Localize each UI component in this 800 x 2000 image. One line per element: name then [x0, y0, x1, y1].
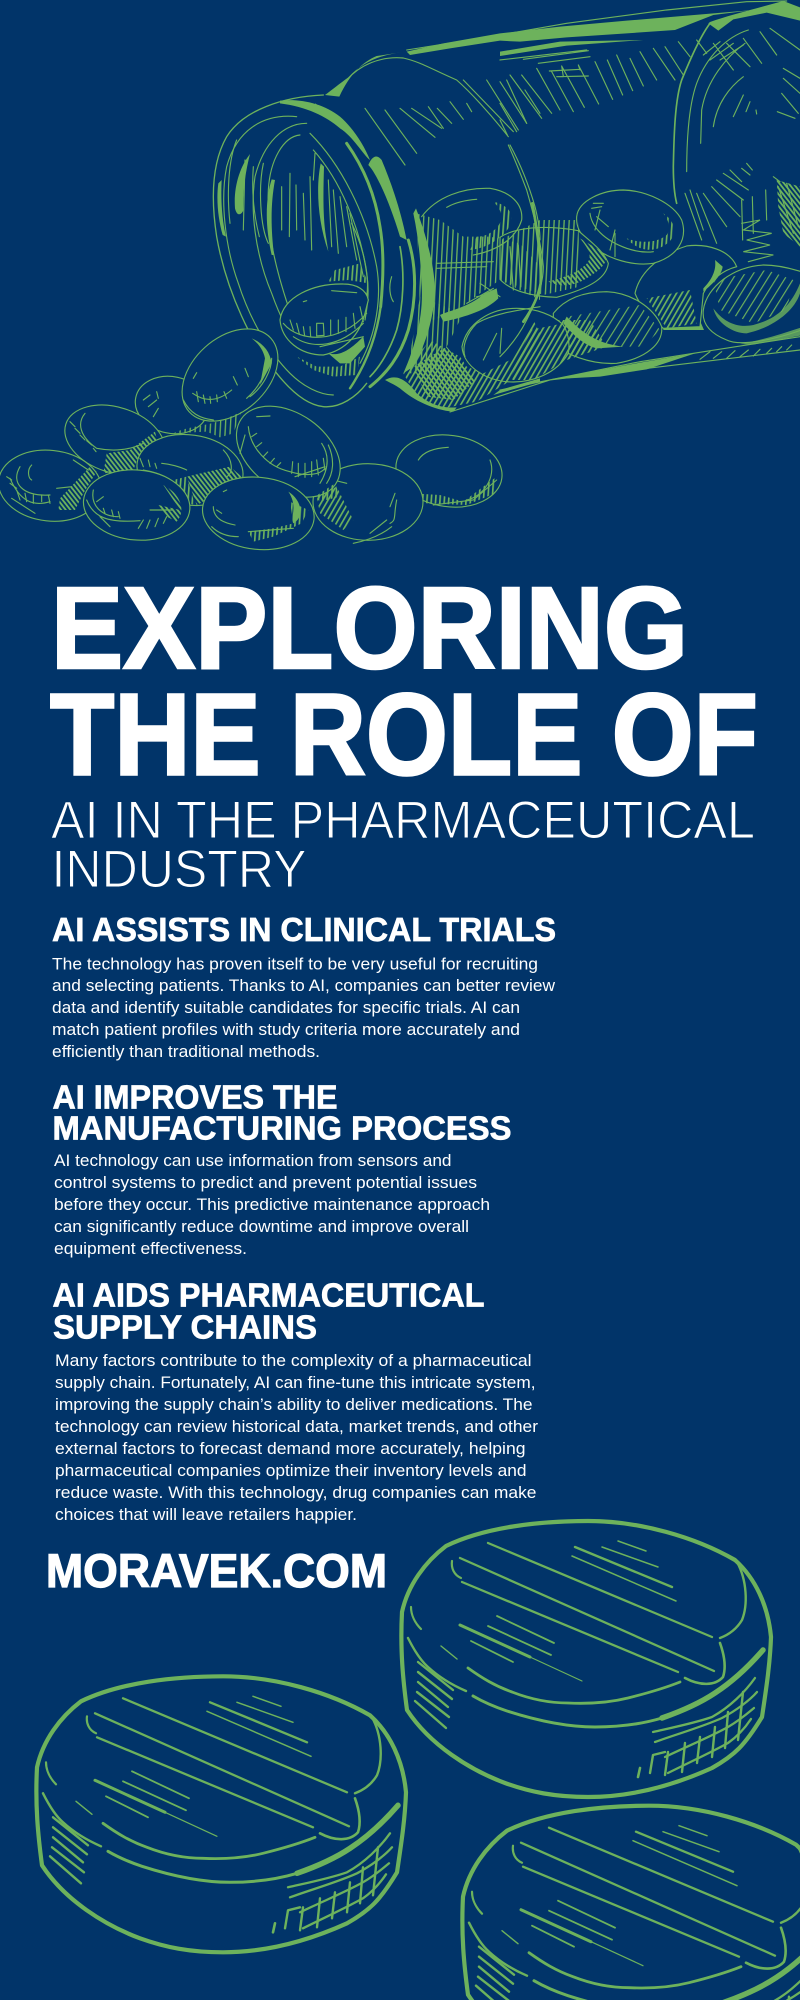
section 3 text: pharmaceutical companies optimize their inventory levels and: [55, 1461, 526, 1480]
section 3 text: technology can review historical data, market trends, and other: [55, 1417, 538, 1436]
section 2 text: AI technology can use information from sensors and: [54, 1151, 452, 1170]
section 2 text: control systems to predict and prevent potential issues: [54, 1173, 477, 1192]
pill P3: [500, 227, 608, 297]
teeth in mouth: [328, 263, 368, 283]
section 3 heading: SUPPLY CHAINS: [53, 1310, 317, 1346]
tablet bottom right: [462, 1806, 800, 2000]
section 1 text: match patient profiles with study criteria more accurately and: [52, 1020, 520, 1039]
main shoulder curve: [500, 145, 543, 357]
tablet bottom left: [36, 1676, 406, 1952]
section 2 heading: [52, 1080, 512, 1148]
pill P5: [462, 308, 569, 382]
spilled pill bottom centre: [199, 472, 318, 555]
top edge streaks: [407, 1, 800, 56]
section 2 heading: MANUFACTURING PROCESS: [52, 1110, 512, 1148]
bottle illustration with spilled pills: [0, 1, 800, 555]
neck hatching: [417, 213, 540, 320]
section 2 text: [54, 1151, 490, 1258]
section 3 text: external factors to forecast demand more accurately, helping: [55, 1439, 526, 1458]
subtitle: AI IN THE PHARMACEUTICAL: [51, 791, 755, 850]
pill P7 base: [703, 265, 800, 343]
tablet top right: [401, 1521, 771, 1797]
neck shoulder: [325, 52, 403, 97]
main title: EXPLORING: [51, 563, 688, 693]
section 2 heading: AI IMPROVES THE: [52, 1080, 338, 1116]
pill P6: [635, 245, 737, 328]
section 2 text: before they occur. This predictive maintenance approach: [54, 1195, 490, 1214]
section 3 heading: AI AIDS PHARMACEUTICAL: [52, 1278, 484, 1314]
pill P4: [553, 292, 662, 363]
section 3 text: Many factors contribute to the complexity of a pharmaceutical: [55, 1351, 532, 1370]
section 1 text: The technology has proven itself to be very useful for recruiting: [52, 954, 538, 974]
section 3 text: supply chain. Fortunately, AI can fine-tune this intricate system,: [55, 1373, 536, 1392]
spilled pill centre: [132, 428, 248, 512]
bottom edge of bottle: [450, 337, 800, 412]
section 1 text: and selecting patients. Thanks to AI, companies can better review: [52, 976, 556, 995]
spilled pill far right: [391, 428, 507, 514]
section 1 text: [52, 954, 556, 1061]
spilled pill far left: [0, 445, 105, 526]
spilled pill left centre: [80, 465, 193, 545]
main title: [50, 563, 758, 800]
lower neck mass: [403, 320, 540, 408]
heavy rim bands: [280, 100, 407, 240]
section 3 heading: [52, 1278, 484, 1346]
spilled pill leaning against mouth: [164, 310, 296, 440]
spilled pills: [0, 310, 507, 555]
section 3: supply chains: [52, 1278, 538, 1524]
rim lines: [213, 95, 367, 407]
section 1 text: efficiently than traditional methods.: [52, 1042, 320, 1061]
pill P1: [422, 188, 522, 255]
spilled pill right: [313, 464, 423, 543]
website url: MORAVEK.COM: [46, 1545, 387, 1598]
spilled pill upper left: [56, 393, 174, 487]
rear arcs of bottle: [673, 23, 710, 203]
bottle body and rear: [407, 1, 800, 412]
section 3 text: [55, 1351, 538, 1524]
subtitle: INDUSTRY: [52, 840, 306, 899]
pill P2: [577, 190, 684, 264]
mouth pill: [280, 284, 368, 355]
subtitle: [51, 791, 755, 899]
shoulder hatching: [500, 42, 690, 135]
spilled pill behind: [130, 370, 213, 440]
bottle mouth and neck: [213, 52, 540, 412]
section 1 text: data and identify suitable candidates for specific trials. AI can: [52, 998, 520, 1017]
right side lower hatching: [685, 163, 767, 243]
left blotches: [217, 154, 328, 255]
section 3 text: improving the supply chain’s ability to deliver medications. The: [55, 1395, 532, 1414]
section 2 text: equipment effectiveness.: [54, 1239, 247, 1258]
section 3 text: choices that will leave retailers happier.: [55, 1505, 357, 1524]
section 2: manufacturing: [52, 1080, 512, 1258]
section 2 text: can significantly reduce downtime and improve overall: [54, 1217, 469, 1236]
spilled pill middle right: [219, 387, 357, 516]
section 1: clinical trials: [52, 912, 556, 1061]
section 3 text: reduce waste. With this technology, drug companies can make: [55, 1483, 536, 1502]
section 1 heading: AI ASSISTS IN CLINICAL TRIALS: [52, 912, 556, 949]
